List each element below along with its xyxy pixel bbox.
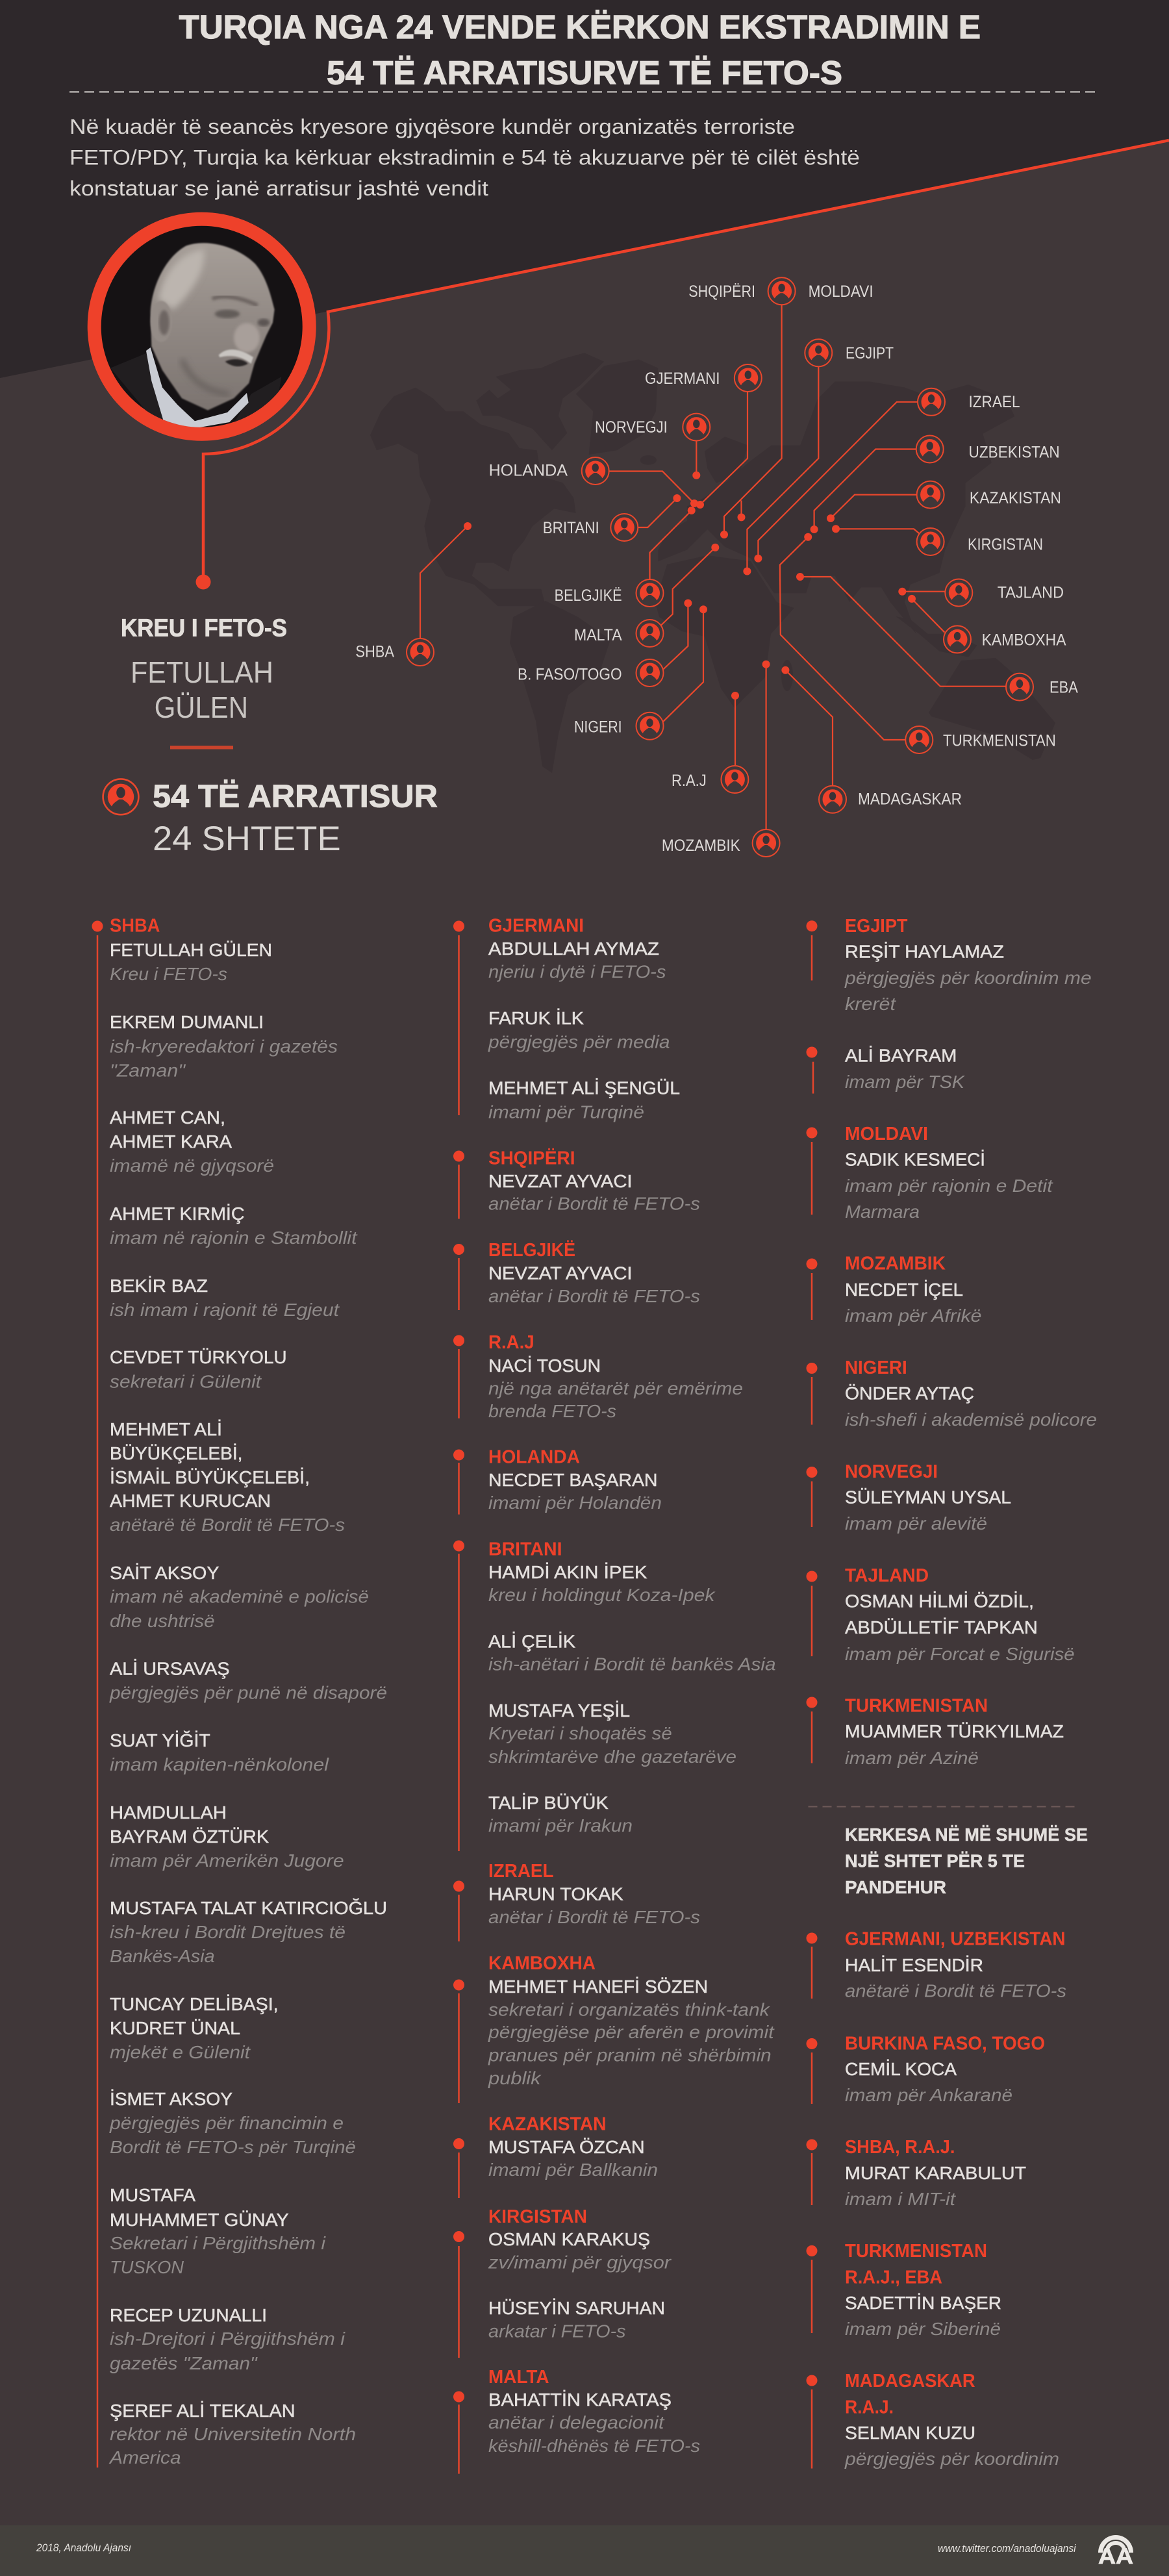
group: Egjipt: REŞİT HAYLAMAZ — [845, 942, 1004, 962]
group: Kamboxha: sekretari i organizatës think-tank — [488, 2000, 771, 2020]
map labels: NORVEGJI — [595, 418, 668, 436]
group: Britani: TALİP BÜYÜK — [488, 1793, 609, 1813]
group: Izrael: HARUN TOKAK — [488, 1884, 623, 1904]
group: Madagaskar, R.A.J.: R.A.J. — [845, 2397, 894, 2418]
connector line from header to portrait — [203, 140, 1169, 582]
group: Mozambik: MOZAMBIK — [845, 1254, 946, 1274]
line: Egjipt — [743, 367, 818, 575]
leader name block: KREU I FETO-S — [121, 614, 287, 642]
footer: www.twitter.com/anadoluajansi — [938, 2542, 1077, 2555]
entry: Mustafa Talat Katircioğlu: MUSTAFA TALAT KATIRCIOĞLU — [110, 1898, 387, 1918]
entry: Ekrem Dumanli: "Zaman" — [110, 1061, 186, 1081]
group: Kamboxha: pranues për pranim në shërbimin — [488, 2045, 772, 2065]
group: Malta — [453, 2367, 700, 2474]
entry: Mehmet Ali Büyükçelebi and others — [110, 1419, 345, 1535]
line: Kirgistan — [832, 525, 920, 535]
entry: Mehmet Ali Büyükçelebi and others: MEHMET ALİ — [110, 1419, 222, 1439]
group: Britani: shkrimtarëve dhe gazetarëve — [488, 1747, 736, 1767]
group: Egjipt: EGJIPT — [845, 916, 908, 937]
map labels: MADAGASKAR — [858, 790, 962, 809]
group: Britani: Kryetari i shoqatës së — [488, 1723, 672, 1743]
timeline — [92, 921, 103, 2468]
entry: Tuncay Delibaşi, Kudret Ünal — [110, 1994, 279, 2062]
entry: Suat Yiğit: imam kapiten-nënkolonel — [110, 1754, 329, 1774]
entry: Fetullah Gülen — [110, 940, 272, 984]
entry: Ekrem Dumanli: EKREM DUMANLI — [110, 1012, 264, 1032]
group: Turkmenistan — [807, 1695, 1064, 1768]
group: Holanda — [453, 1447, 662, 1515]
group: Gjermani, Uzbekistan — [807, 1929, 1066, 2001]
line: Gjermani — [696, 392, 748, 509]
line: Madagaskar — [781, 666, 833, 785]
group: Britani: ALİ ÇELİK — [488, 1632, 575, 1651]
line: Burkina Faso / Togo — [662, 600, 692, 670]
map labels: HOLANDA — [489, 461, 568, 479]
group: Nigeri: ÖNDER AYTAÇ — [845, 1383, 974, 1404]
group: Norvegji: NORVEGJI — [845, 1461, 938, 1482]
entry: Sait Aksoy — [110, 1563, 369, 1631]
entry: Ismet Aksoy — [109, 2089, 356, 2157]
group: Malta: BAHATTİN KARATAŞ — [488, 2390, 672, 2410]
leader name block: FETULLAH — [131, 655, 273, 689]
map labels: BRITANI — [543, 519, 599, 537]
group: Britani: MUSTAFA YEŞİL — [488, 1700, 630, 1721]
group: Tajland: imam për Forcat e Sigurisë — [845, 1644, 1075, 1664]
entry: Ali Ursavaş — [109, 1658, 387, 1703]
group: Britani: imami për Irakun — [488, 1815, 633, 1836]
group: Holanda: NECDET BAŞARAN — [488, 1470, 657, 1490]
line: SHBA — [420, 522, 471, 638]
entry: Mustafa Muhammet Günay: MUHAMMET GÜNAY — [110, 2210, 289, 2230]
entry: Recep Uzunalli: gazetës "Zaman" — [110, 2353, 258, 2373]
group: Turkmenistan: imam për Azinë — [845, 1748, 979, 1768]
map labels: IZRAEL — [969, 393, 1020, 411]
line: Mozambik — [762, 661, 770, 829]
group: R.A.J: brenda FETO-s — [488, 1401, 616, 1421]
entry: Ismet Aksoy: Bordit të FETO-s për Turqinë — [110, 2137, 356, 2157]
entry: Cevdet Türkyolu: CEVDET TÜRKYOLU — [110, 1347, 287, 1367]
group: Kamboxha — [453, 1953, 775, 2103]
line: Holanda — [609, 472, 698, 507]
entry: Ahmet Can, Ahmet Kara: imamë në gjyqsorë — [110, 1155, 274, 1176]
group: Gjermani: njeriu i dytë i FETO-s — [488, 962, 666, 982]
map labels: NIGERI — [574, 718, 622, 737]
group: Gjermani, Uzbekistan: HALİT ESENDİR — [845, 1955, 983, 1975]
line: Turkmenistan — [780, 533, 905, 740]
line: Shqipëri / Moldavi — [720, 305, 782, 538]
group: Turkmenistan, R.A.J., EBA — [807, 2241, 1001, 2339]
group: Belgjikë: BELGJIKË — [488, 1239, 575, 1261]
group: Madagaskar, R.A.J.: MADAGASKAR — [845, 2371, 975, 2392]
group: Britani: ish-anëtari i Bordit të bankës Asia — [488, 1654, 776, 1674]
line: Tajland — [898, 588, 945, 596]
group: Burkina Faso, Togo: imam për Ankaranë — [845, 2085, 1012, 2105]
group: Moldavi: Marmara — [845, 1202, 920, 1222]
entry: Tuncay Delibaşi, Kudret Ünal: TUNCAY DELİBAŞI, — [110, 1994, 279, 2014]
entry: Ekrem Dumanli — [110, 1012, 338, 1081]
group: Mozambik: imam për Afrikë — [845, 1306, 982, 1326]
column 1: SHBA — [92, 915, 387, 2468]
entry: Mustafa Muhammet Günay: Sekretari i Përgjithshëm i — [110, 2233, 326, 2253]
entry: Mustafa Talat Katircioğlu — [110, 1898, 387, 1966]
entry: Bekir Baz: ish imam i rajonit të Egjeut — [110, 1300, 340, 1320]
line: R.A.J — [731, 692, 739, 765]
entry: Suat Yiğit — [110, 1730, 329, 1774]
group: Izrael: anëtar i Bordit të FETO-s — [488, 1907, 700, 1927]
entry: Fetullah Gülen: FETULLAH GÜLEN — [110, 940, 272, 960]
map labels: TURKMENISTAN — [943, 732, 1056, 750]
group: Gjermani: FARUK İLK — [488, 1008, 584, 1028]
entry: Ahmet Can, Ahmet Kara: AHMET KARA — [110, 1131, 232, 1152]
map labels: MALTA — [574, 626, 622, 644]
group: Belgjikë — [453, 1239, 700, 1310]
connector lines and endpoints — [420, 305, 1006, 829]
line: EBA — [796, 573, 1006, 687]
entry: Suat Yiğit: SUAT YİĞİT — [110, 1730, 210, 1750]
group: Shqipëri: NEVZAT AYVACI — [488, 1171, 633, 1191]
map labels: R.A.J — [672, 772, 707, 790]
map labels: SHBA — [355, 643, 394, 661]
entry: Tuncay Delibaşi, Kudret Ünal: mjekët e Gülenit — [110, 2042, 251, 2062]
group: Turkmenistan: TURKMENISTAN — [845, 1695, 988, 1716]
entry: Mustafa Talat Katircioğlu: Bankës-Asia — [110, 1946, 215, 1966]
group: Nigeri: ish-shefi i akademisë policore — [845, 1409, 1097, 1430]
group: Kazakistan: KAZAKISTAN — [488, 2114, 607, 2134]
group: Turkmenistan, R.A.J., EBA: imam për Siberinë — [845, 2319, 1001, 2339]
entry: Sait Aksoy: dhe ushtrisë — [110, 1611, 215, 1631]
entry: Ali Ursavaş: përgjegjës për punë në disaporë — [109, 1683, 387, 1703]
entry: Sait Aksoy: imam në akademinë e policisë — [110, 1587, 369, 1607]
country heading: SHBA: SHBA — [110, 915, 160, 936]
heading: multi-country requests: NJË SHTET PËR 5 TE — [845, 1850, 1025, 1871]
group: Gjermani, Uzbekistan: anëtarë i Bordit të FETO-s — [845, 1981, 1066, 2001]
map labels: BELGJIKË — [555, 587, 622, 605]
group: Belgjikë: NEVZAT AYVACI — [488, 1263, 633, 1283]
group: Nigeri — [807, 1357, 1097, 1430]
group: Burkina Faso, Togo: BURKINA FASO, TOGO — [845, 2033, 1045, 2054]
intro paragraph: Në kuadër të seancës kryesore gjyqësore kundër organizatës terroriste — [69, 115, 795, 138]
group: Britani: kreu i holdingut Koza-Ipek — [488, 1585, 716, 1605]
summary: 54 fugitives, 24 states — [103, 779, 438, 858]
entry: Hamdullah Bayram Öztürk — [110, 1802, 344, 1871]
group: R.A.J: R.A.J — [488, 1332, 534, 1353]
map labels: MOZAMBIK — [662, 837, 740, 855]
entry: Mustafa Talat Katircioğlu: ish-kreu i Bordit Drejtues të — [110, 1922, 346, 1942]
group: R.A.J: NACİ TOSUN — [488, 1356, 601, 1376]
group: Shqipëri — [453, 1148, 700, 1219]
line: Uzbekistan — [811, 449, 916, 533]
group: Kirgistan: KIRGISTAN — [488, 2206, 587, 2227]
group: Malta: MALTA — [488, 2367, 549, 2388]
line: Norvegji — [692, 441, 700, 479]
intro paragraph: FETO/PDY, Turqia ka kërkuar ekstradimin e 54 të akuzuarve për të cilët është — [69, 146, 860, 170]
group: Kazakistan: imami për Ballkanin — [488, 2160, 658, 2180]
line: Izrael — [754, 402, 918, 562]
group: Burkina Faso, Togo: CEMİL KOCA — [845, 2059, 957, 2079]
map labels: EBA — [1050, 678, 1078, 696]
heading: multi-country requests — [845, 1825, 1088, 1897]
entry: Bekir Baz — [110, 1276, 340, 1320]
world map — [370, 353, 1055, 773]
leader name block: GÜLEN — [155, 690, 248, 724]
leader name block — [121, 614, 287, 750]
entry: Hamdullah Bayram Öztürk: HAMDULLAH — [110, 1802, 227, 1823]
entry: Sait Aksoy: SAİT AKSOY — [110, 1563, 220, 1583]
title — [179, 8, 981, 91]
group: Turkmenistan, R.A.J., EBA: R.A.J., EBA — [845, 2267, 942, 2288]
entry: Mustafa Muhammet Günay — [110, 2185, 326, 2277]
icon: Anadolu Agency logo: AA — [1098, 2544, 1133, 2569]
dark header wedge — [0, 0, 1169, 378]
group: Belgjikë: anëtar i Bordit të FETO-s — [488, 1286, 700, 1306]
group: Moldavi: imam për rajonin e Detit — [845, 1176, 1053, 1196]
entry: Şeref Ali Tekalan: ŞEREF ALİ TEKALAN — [110, 2401, 295, 2421]
portrait of Fetullah Gülen — [94, 140, 1169, 590]
group: SHBA, R.A.J.: imam i MIT-it — [845, 2189, 956, 2209]
group: Kazakistan: MUSTAFA ÖZCAN — [488, 2137, 645, 2157]
entry: Ahmet Can, Ahmet Kara: AHMET CAN, — [110, 1107, 225, 1128]
map labels: B. FASO/TOGO — [518, 666, 622, 684]
group: Britani: HAMDİ AKIN İPEK — [488, 1562, 647, 1582]
entry: Şeref Ali Tekalan — [108, 2401, 356, 2468]
group: Burkina Faso, Togo — [807, 2033, 1045, 2105]
line: Britani — [638, 494, 681, 527]
entry: Ahmet Can, Ahmet Kara — [110, 1107, 274, 1176]
group: Mozambik: NECDET İÇEL — [845, 1280, 963, 1300]
entry: Mustafa Muhammet Günay: MUSTAFA — [110, 2185, 195, 2205]
group: Tajland — [807, 1565, 1075, 1664]
group: Gjermani: përgjegjës për media — [488, 1031, 670, 1052]
group: Gjermani: GJERMANI — [488, 915, 584, 936]
group: Izrael — [453, 1861, 700, 1941]
entry: Ismet Aksoy: İSMET AKSOY — [110, 2089, 233, 2109]
group: Ali Bayram: imam për TSK — [845, 1072, 965, 1092]
entry: Mehmet Ali Büyükçelebi and others: anëtarë të Bordit të FETO-s — [110, 1515, 345, 1535]
column 2 — [453, 915, 776, 2474]
group: Norvegji: SÜLEYMAN UYSAL — [845, 1487, 1011, 1508]
group: Malta: anëtar i delegacionit — [488, 2412, 665, 2432]
title: 54 TË ARRATISURVE TË FETO-S — [327, 55, 842, 91]
entry: Recep Uzunalli — [110, 2305, 346, 2373]
group: Moldavi: MOLDAVI — [845, 1124, 928, 1144]
map labels: KIRGISTAN — [968, 535, 1043, 553]
group: Kazakistan — [453, 2114, 658, 2198]
map labels: EGJIPT — [846, 344, 894, 362]
entry: Şeref Ali Tekalan: America — [108, 2447, 181, 2468]
footer — [0, 2525, 1169, 2576]
group: Ali Bayram: ALİ BAYRAM — [845, 1046, 957, 1066]
line: Nigeri — [662, 605, 707, 722]
group: Tajland: OSMAN HİLMİ ÖZDİL, — [845, 1591, 1034, 1611]
entry: Mustafa Muhammet Günay: TUSKON — [110, 2257, 184, 2277]
group: R.A.J — [453, 1332, 743, 1421]
intro paragraph: konstatuar se janë arratisur jashtë vendit — [69, 177, 488, 200]
group: Gjermani: imami për Turqinë — [488, 1102, 644, 1122]
group: Tajland: TAJLAND — [845, 1565, 929, 1586]
group: Norvegji — [807, 1461, 1011, 1534]
entry: Recep Uzunalli: ish-Drejtori i Përgjithshëm i — [110, 2329, 346, 2349]
group: Turkmenistan, R.A.J., EBA: TURKMENISTAN — [845, 2241, 987, 2262]
group: Gjermani — [453, 915, 680, 1122]
line: Malta — [661, 544, 719, 625]
entry: Ismet Aksoy: përgjegjës për financimin e — [109, 2113, 344, 2133]
entry: Mehmet Ali Büyükçelebi and others: AHMET KURUCAN — [110, 1491, 271, 1511]
entry: Ahmet Kirmiç — [110, 1204, 358, 1248]
entry: Şeref Ali Tekalan: rektor në Universitetin North — [110, 2424, 356, 2444]
title: TURQIA NGA 24 VENDE KËRKON EKSTRADIMIN E — [179, 8, 981, 45]
group: Kamboxha: publik — [488, 2068, 542, 2088]
entry: Hamdullah Bayram Öztürk: imam për Amerikën Jugore — [110, 1850, 344, 1871]
group: SHBA, R.A.J. — [807, 2137, 1026, 2209]
group: R.A.J: një nga anëtarët për emërime — [488, 1378, 743, 1398]
entry: Fetullah Gülen: Kreu i FETO-s — [110, 964, 227, 984]
group: Turkmenistan, R.A.J., EBA: SADETTİN BAŞER — [845, 2293, 1001, 2313]
map labels: KAMBOXHA — [982, 631, 1066, 650]
group: Norvegji: imam për alevitë — [845, 1513, 987, 1534]
map labels: MOLDAVI — [809, 283, 874, 301]
map labels: UZBEKISTAN — [969, 443, 1060, 461]
intro paragraph — [69, 115, 860, 200]
footer: 2018, Anadolu Ajansı — [36, 2542, 131, 2554]
group: Kamboxha: MEHMET HANEFİ SÖZEN — [488, 1976, 708, 1997]
group: Turkmenistan: MUAMMER TÜRKYILMAZ — [845, 1721, 1064, 1741]
group: Britani: BRITANI — [488, 1539, 562, 1560]
group: Ali Bayram — [807, 1046, 965, 1094]
map labels: GJERMANI — [645, 370, 720, 388]
entry: Mehmet Ali Büyükçelebi and others: BÜYÜKÇELEBİ, — [110, 1443, 243, 1463]
group: Nigeri: NIGERI — [845, 1357, 907, 1378]
group: Gjermani, Uzbekistan: GJERMANI, UZBEKISTAN — [845, 1929, 1065, 1950]
entry: Cevdet Türkyolu: sekretari i Gülenit — [110, 1372, 262, 1391]
group: Madagaskar, R.A.J.: SELMAN KUZU — [845, 2423, 975, 2443]
group: SHBA, R.A.J.: MURAT KARABULUT — [845, 2163, 1026, 2183]
entry: Mehmet Ali Büyükçelebi and others: İSMAİL BÜYÜKÇELEBİ, — [110, 1467, 310, 1487]
map labels: SHQIPËRI — [688, 283, 755, 301]
entry: Cevdet Türkyolu — [110, 1347, 287, 1391]
heading: multi-country requests: PANDEHUR — [845, 1877, 946, 1897]
group: Izrael: IZRAEL — [488, 1861, 553, 1882]
group: Madagaskar, R.A.J. — [807, 2371, 1059, 2469]
group: SHBA, R.A.J.: SHBA, R.A.J. — [845, 2137, 955, 2158]
entry: Ahmet Kirmiç: AHMET KIRMİÇ — [110, 1204, 244, 1224]
map labels: KAZAKISTAN — [970, 489, 1061, 507]
group: Kamboxha: përgjegjëse për aferën e provimit — [488, 2022, 775, 2042]
summary: 54 fugitives, 24 states: 24 SHTETE — [153, 820, 341, 858]
entry: Ahmet Kirmiç: imam në rajonin e Stambollit — [110, 1228, 358, 1248]
group: Gjermani: ABDULLAH AYMAZ — [488, 939, 659, 959]
group: Kamboxha: KAMBOXHA — [488, 1953, 596, 1974]
map labels — [355, 283, 1078, 855]
line: Kazakistan — [827, 495, 917, 522]
group: Moldavi — [807, 1124, 1053, 1222]
group: Tajland: ABDÜLLETİF TAPKAN — [845, 1617, 1038, 1637]
column 3 — [807, 916, 1097, 2469]
group: Malta: këshill-dhënës të FETO-s — [488, 2436, 700, 2456]
group: Mozambik — [807, 1254, 982, 1326]
group: Shqipëri: SHQIPËRI — [488, 1148, 575, 1169]
icon: Anadolu Agency logo — [1098, 2535, 1133, 2569]
entry: Ali Ursavaş: ALİ URSAVAŞ — [110, 1658, 230, 1678]
line: Belgjikë — [649, 507, 696, 579]
group: Madagaskar, R.A.J.: përgjegjës për koordinim — [844, 2449, 1059, 2469]
group: Kirgistan — [453, 2206, 672, 2358]
group: Egjipt: përgjegjës për koordinim me — [844, 968, 1092, 988]
entry: Bekir Baz: BEKİR BAZ — [110, 1276, 208, 1296]
group: Gjermani: MEHMET ALİ ŞENGÜL — [488, 1078, 680, 1098]
group: Egjipt — [807, 916, 1092, 1014]
entry: Hamdullah Bayram Öztürk: BAYRAM ÖZTÜRK — [110, 1826, 269, 1847]
group: Egjipt: krerët — [845, 994, 896, 1014]
group: Holanda: HOLANDA — [488, 1447, 580, 1468]
group: Moldavi: SADIK KESMECİ — [845, 1150, 985, 1170]
group: Kirgistan: arkatar i FETO-s — [488, 2321, 626, 2342]
group: Kirgistan: OSMAN KARAKUŞ — [488, 2229, 650, 2249]
entry: Ekrem Dumanli: ish-kryeredaktori i gazetës — [110, 1036, 338, 1056]
group: Kirgistan: zv/imami për gjyqsor — [488, 2253, 672, 2273]
group: Holanda: imami për Holandën — [488, 1493, 662, 1513]
map labels: TAJLAND — [998, 583, 1064, 601]
map markers — [407, 277, 1033, 857]
entry: Tuncay Delibaşi, Kudret Ünal: KUDRET ÜNAL — [110, 2018, 240, 2038]
heading: multi-country requests: KERKESA NË MË SHUMË SE — [845, 1825, 1088, 1845]
line: Kamboxha — [908, 595, 944, 633]
group: Britani — [453, 1539, 776, 1851]
group: Shqipëri: anëtar i Bordit të FETO-s — [488, 1194, 700, 1214]
entry: Recep Uzunalli: RECEP UZUNALLI — [110, 2305, 267, 2325]
group: Kirgistan: HÜSEYİN SARUHAN — [488, 2298, 665, 2318]
summary: 54 fugitives, 24 states: 54 TË ARRATISUR — [153, 779, 438, 814]
